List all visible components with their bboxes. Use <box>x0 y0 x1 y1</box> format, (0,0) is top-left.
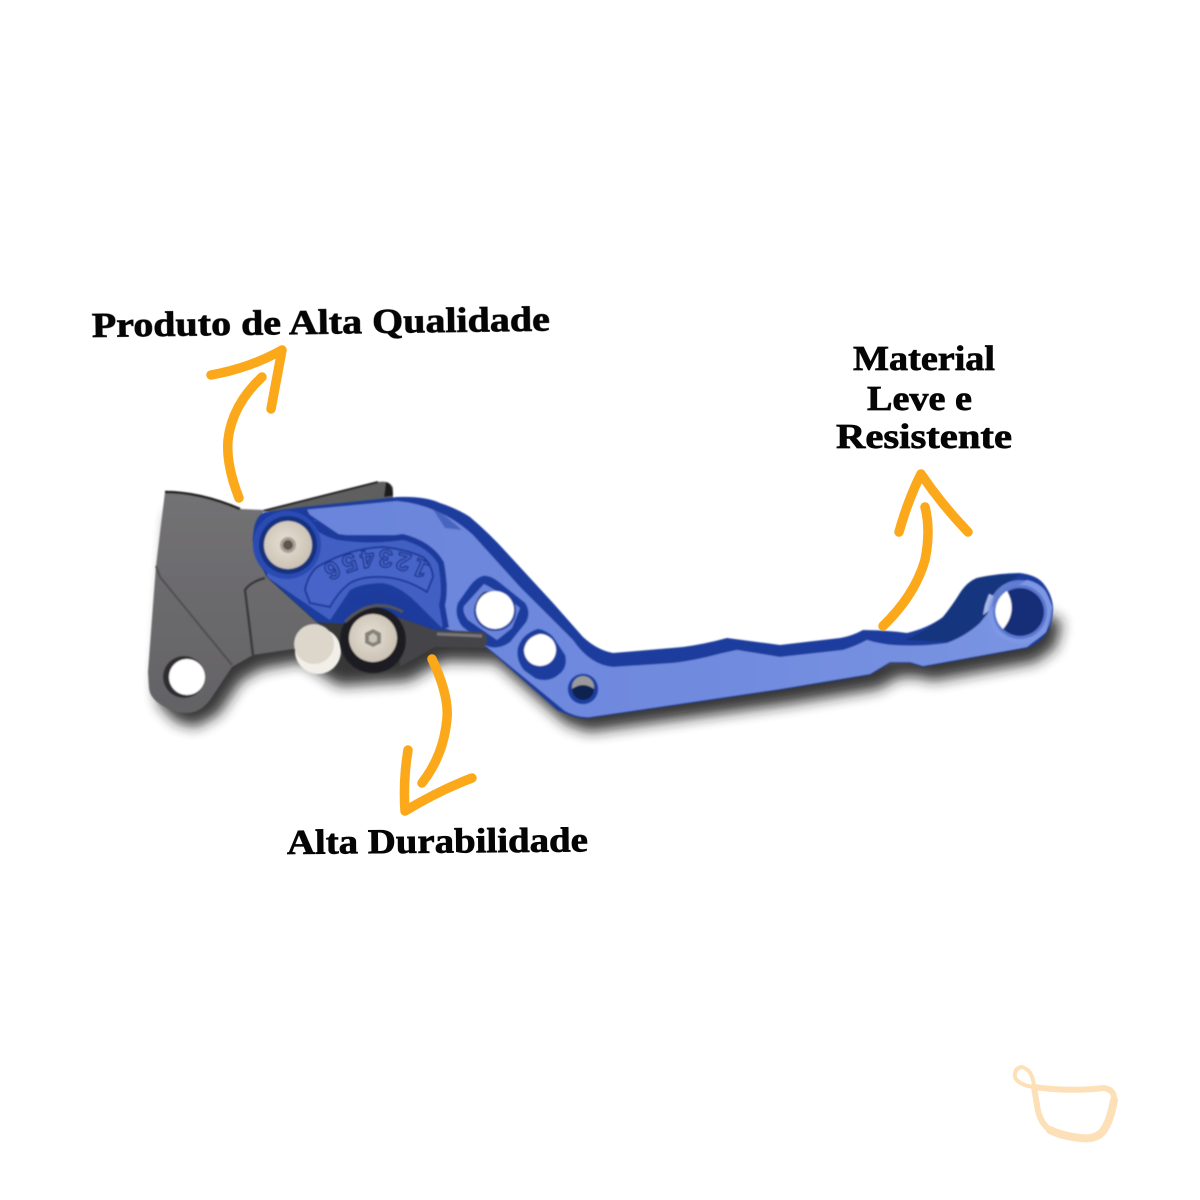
pivot screw <box>253 511 321 579</box>
lever adjustment holes <box>457 576 1052 704</box>
logo: pale orange bag watermark <box>1015 1067 1114 1138</box>
embossed lever numbers: 123456 <box>324 548 429 580</box>
black adjuster arm and screw <box>340 605 487 673</box>
arrow: to Material Leve e Resistente <box>883 474 968 626</box>
label: Produto de Alta Qualidade: Produto de Alta Qualidade <box>92 300 550 345</box>
arrow: to Alta Durabilidade <box>404 659 472 811</box>
light face of the lever <box>303 501 1052 717</box>
highlight on lever end <box>983 594 994 615</box>
embossed number band <box>305 547 433 607</box>
dark housing <box>148 482 393 713</box>
lever drop shadow <box>157 514 1062 732</box>
label: Material Leve e Resistente: Resistente <box>836 417 1012 456</box>
label: Material Leve e Resistente: Leve e <box>867 379 972 418</box>
label: Alta Durabilidade: Alta Durabilidade <box>287 820 588 862</box>
blue lever body <box>252 496 1054 720</box>
product photo: blue brake lever <box>146 480 1072 742</box>
dark channel <box>304 510 446 628</box>
silver roller <box>294 624 341 674</box>
label: Material Leve e Resistente <box>836 339 1012 456</box>
label: Material Leve e Resistente: Material <box>853 339 995 378</box>
medium blue panel below the channel <box>267 515 447 628</box>
arrow: to Produto de Alta Qualidade <box>211 350 282 498</box>
